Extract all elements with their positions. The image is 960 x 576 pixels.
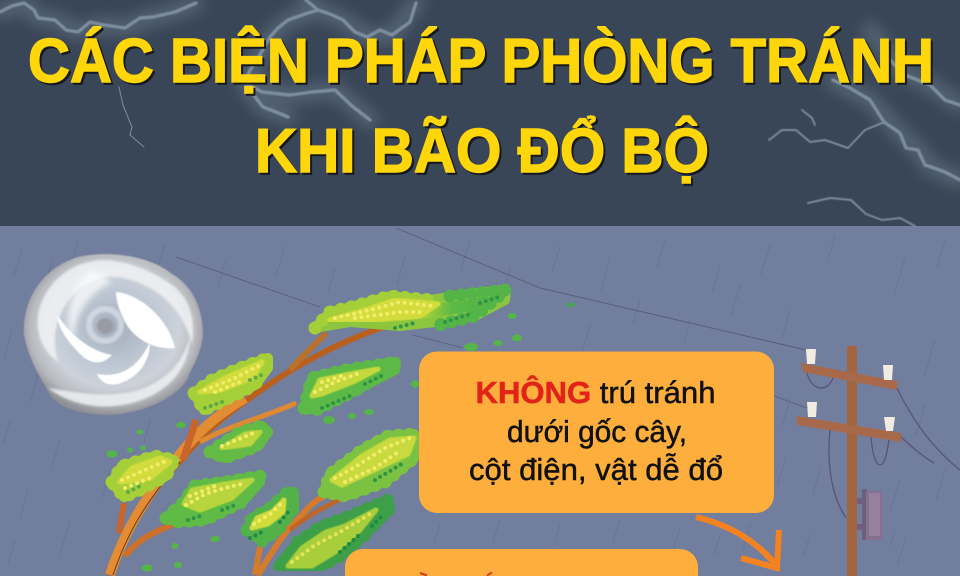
title: KHI BÃO ĐỔ BỘ — [255, 116, 709, 186]
canopy: lower left — [112, 456, 174, 497]
canopy: right upper — [324, 434, 414, 496]
background: storm sky header — [0, 0, 960, 226]
canopy: upper right — [304, 362, 396, 410]
utility pole — [796, 346, 960, 576]
pole wires — [807, 373, 960, 518]
lightning bolts — [0, 0, 960, 226]
icon: typhoon — [24, 254, 203, 415]
callout: do not shelter: dưới gốc cây, — [507, 414, 687, 449]
tree: trunks and branches — [108, 326, 386, 575]
callout: do not shelter: cột điện, vật dễ đổ — [469, 452, 723, 487]
callout: second advice box, cut off by the bottom edge — [345, 549, 698, 576]
crossarm upper — [801, 363, 897, 390]
rain streaks — [3, 236, 945, 564]
flying leaves — [106, 302, 576, 572]
callout: do not shelter: KHÔNG trú tránh — [476, 374, 716, 410]
canopy: right lower dark — [278, 500, 390, 566]
canopy: lower centre — [166, 476, 260, 522]
crossarm lower — [796, 416, 901, 442]
canopy: upper left — [194, 358, 268, 410]
callout: do not shelter — [419, 352, 774, 513]
background: rainy scene — [0, 226, 960, 576]
power lines — [176, 228, 807, 408]
canopy: small centre — [247, 492, 294, 541]
arrow — [696, 517, 779, 568]
insulators — [806, 349, 895, 431]
pole shaft — [847, 346, 857, 576]
electrical box — [857, 489, 882, 540]
canopy: middle green — [210, 426, 268, 458]
canopy: top — [315, 290, 506, 328]
title — [28, 27, 934, 186]
